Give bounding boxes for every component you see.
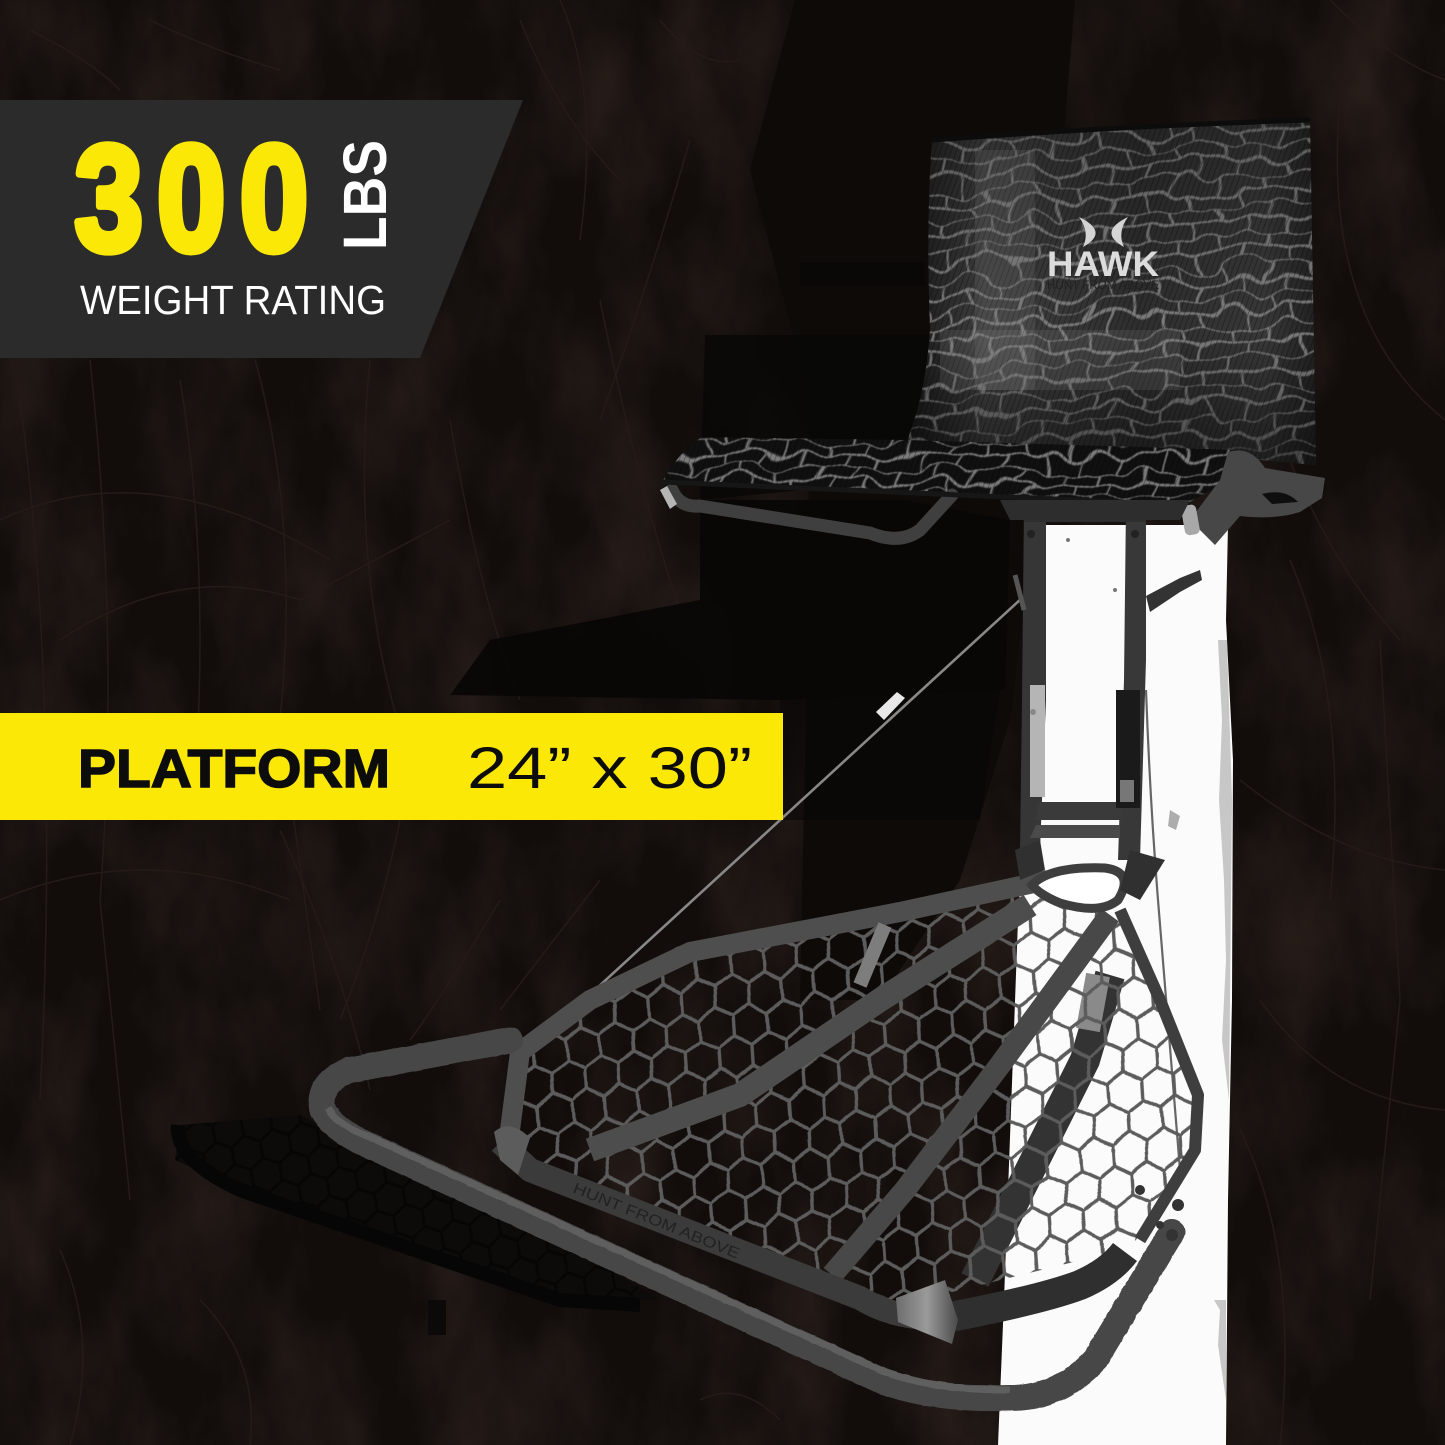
front end cap [660, 486, 677, 509]
hanging tag strap [860, 925, 885, 985]
tube lettering: HUNT FROM ABOVE [571, 1180, 742, 1262]
metal sleeve [896, 1280, 958, 1344]
shadow: lower platform [171, 1115, 640, 1335]
floor mesh [523, 898, 1192, 1300]
weight rating label: WEIGHT RATING [80, 277, 386, 323]
seat cushion [664, 437, 1240, 502]
rear seat bracket [1190, 450, 1325, 545]
platform label: PLATFORM [78, 739, 390, 799]
platform dimensions: 24” x 30” [467, 736, 752, 801]
LBS unit: LBS [331, 140, 399, 250]
upper frame band [510, 880, 1048, 1130]
shadow of tree stand behind [160, 262, 1010, 1335]
platform size banner [0, 713, 783, 820]
seat back [908, 122, 1316, 465]
tube end cap left [494, 1126, 530, 1175]
weight rating banner [0, 100, 523, 358]
support cable with tag [560, 575, 1024, 1022]
logo wordmark: HAWK [1047, 245, 1159, 284]
seat frame [660, 450, 1325, 545]
logo tagline: HUNT FROM ABOVE [1047, 278, 1159, 292]
bracket left rail [1020, 505, 1046, 850]
right frame band [1120, 910, 1198, 1240]
top hand loop [1032, 868, 1124, 908]
left warning label [1030, 685, 1045, 797]
right side cable [1146, 690, 1180, 1170]
cable tag [876, 692, 905, 720]
tree trunk [750, 0, 1075, 1000]
shadow: lower legs [780, 690, 1000, 820]
light mesh band [975, 150, 1035, 390]
shadow: seat back [700, 335, 930, 500]
bolts at pole [1135, 1185, 1184, 1241]
number 300: 300 [75, 115, 308, 283]
inner front tube [500, 1142, 945, 1318]
right warning label [1116, 690, 1140, 808]
logo crescents [1079, 217, 1128, 247]
seat latch [1181, 504, 1200, 536]
pole bark scratches [1168, 640, 1232, 1400]
centre strap [832, 915, 1110, 1275]
shadow: arm [800, 262, 925, 285]
shadow: seat [450, 500, 1010, 700]
strap buckle [1146, 570, 1202, 612]
diagonal strap left [590, 905, 1030, 1150]
inner right tube [945, 1252, 1125, 1318]
hinge at top [1015, 840, 1165, 900]
seat back top edge [932, 120, 1310, 140]
climbing bracket [1020, 505, 1146, 860]
strut behind mesh [975, 975, 1110, 1280]
platform [322, 840, 1230, 1398]
bracket right rail [1118, 505, 1146, 860]
bracket lower crossbar [1036, 802, 1122, 820]
white tree pole [998, 525, 1233, 1445]
front tube of seat [672, 490, 952, 538]
HAWK logo [1047, 217, 1159, 292]
outer tube [322, 1040, 1172, 1398]
bolts [1030, 709, 1036, 715]
bracket top crossbar [1024, 505, 1146, 522]
